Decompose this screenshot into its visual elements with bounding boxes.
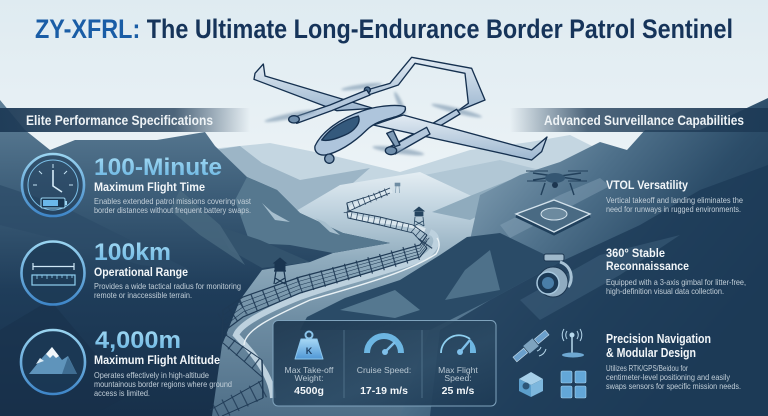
capability: VTOL versatility xyxy=(516,171,743,234)
label: Maximum Flight Time xyxy=(94,180,205,194)
icon: ruler xyxy=(22,242,84,304)
icon: modular blocks xyxy=(561,371,586,398)
drone aircraft illustration xyxy=(254,57,547,163)
icon: weight xyxy=(295,332,323,359)
description: mountainous border regions where ground xyxy=(94,379,232,389)
description xyxy=(606,195,743,214)
watchtower middle xyxy=(414,207,424,226)
description: access is limited. xyxy=(94,388,150,398)
metric: max speed: 25 m/s xyxy=(442,385,474,397)
description: Enables extended patrol missions covering vast xyxy=(94,196,252,206)
heading xyxy=(606,332,711,360)
description xyxy=(94,370,232,398)
description xyxy=(606,277,746,296)
right boom xyxy=(390,109,460,153)
winding border road xyxy=(236,191,439,398)
icon: sensor cube xyxy=(519,372,543,397)
right rear rotor blur xyxy=(431,102,483,120)
heading: 360° Stable xyxy=(606,246,665,260)
description xyxy=(94,196,252,215)
stat: flight time xyxy=(22,154,252,216)
metric: weight xyxy=(285,365,334,397)
metric: cruise speed xyxy=(357,365,411,397)
left front rotor blur xyxy=(264,108,316,124)
nose gear xyxy=(325,154,334,163)
left motor xyxy=(289,116,299,123)
rear rotor hub left xyxy=(364,87,370,93)
stat: operational range xyxy=(22,239,241,304)
description: border distances without frequent battery swaps. xyxy=(94,205,251,215)
front right motor xyxy=(385,147,397,155)
icon: satellite xyxy=(512,329,550,363)
front right rotor blur xyxy=(372,91,424,157)
description: Utilizes RTK/GPS/Beidou for xyxy=(606,363,688,373)
left section banner xyxy=(0,108,250,132)
icon: mountain xyxy=(21,330,85,394)
icon: gimbal camera xyxy=(537,254,571,297)
left wing xyxy=(254,64,373,111)
heading: & Modular Design xyxy=(606,346,696,360)
capability: stable reconnaissance xyxy=(537,246,746,297)
metric: weight: 4500g xyxy=(294,385,324,397)
description: Provides a wide tactical radius for monitoring xyxy=(94,281,241,291)
left section banner: Elite Performance Specifications xyxy=(26,112,213,128)
label: Operational Range xyxy=(94,265,188,279)
description xyxy=(606,363,741,391)
tail booms and stabilizer xyxy=(367,57,485,112)
metric: max speed xyxy=(438,365,478,397)
heading xyxy=(606,246,689,273)
description: high-definition visual data collection. xyxy=(606,286,724,296)
metric: max speed: Max Flight xyxy=(438,365,478,375)
description: remote or inaccessible terrain. xyxy=(94,290,192,300)
metric: cruise speed: 17-19 m/s xyxy=(360,385,408,397)
icon: weight: K xyxy=(306,346,313,356)
left boom xyxy=(293,90,370,123)
icon: max speed gauge xyxy=(441,335,476,355)
right wing xyxy=(373,115,547,160)
fuselage xyxy=(315,105,405,155)
description xyxy=(94,281,241,300)
icon: clock with battery xyxy=(22,154,84,216)
value: 4,000m xyxy=(95,327,181,354)
description: centimeter-level positioning and easily xyxy=(606,372,731,382)
right boom front xyxy=(390,127,430,154)
metric: max speed: Speed: xyxy=(444,373,472,383)
description: swaps sensors for specific mission needs. xyxy=(606,381,741,391)
watchtower far xyxy=(395,183,400,193)
right section banner xyxy=(510,108,768,132)
heading: Precision Navigation xyxy=(606,332,711,346)
metric: weight: Max Take-off xyxy=(285,365,334,375)
border fence xyxy=(210,188,427,416)
landing strut xyxy=(387,131,400,147)
icon: antenna xyxy=(562,329,584,358)
metric: weight: Weight: xyxy=(295,373,323,383)
rear rotor blur left xyxy=(341,81,382,92)
description: Operates effectively in high-altitude xyxy=(94,370,209,380)
heading: VTOL Versatility xyxy=(606,178,688,192)
value: 100-Minute xyxy=(94,154,222,181)
panel: flight specs xyxy=(273,320,496,406)
metric: cruise speed: Cruise Speed: xyxy=(357,365,411,375)
canopy xyxy=(322,116,359,140)
watchtower near xyxy=(274,258,286,284)
icon: quadcopter and landing pad xyxy=(516,171,590,234)
stat: flight altitude xyxy=(21,327,232,398)
capability: navigation and modular design xyxy=(512,329,741,398)
description: Vertical takeoff and landing eliminates the xyxy=(606,195,743,205)
description: need for runways in rugged environments. xyxy=(606,204,741,214)
description: Equipped with a 3-axis gimbal for litter-free, xyxy=(606,277,746,287)
heading: Reconnaissance xyxy=(606,259,689,273)
value: 100km xyxy=(94,239,171,266)
icon: cruise speed gauge xyxy=(367,336,401,355)
label: Maximum Flight Altitude xyxy=(94,353,220,367)
